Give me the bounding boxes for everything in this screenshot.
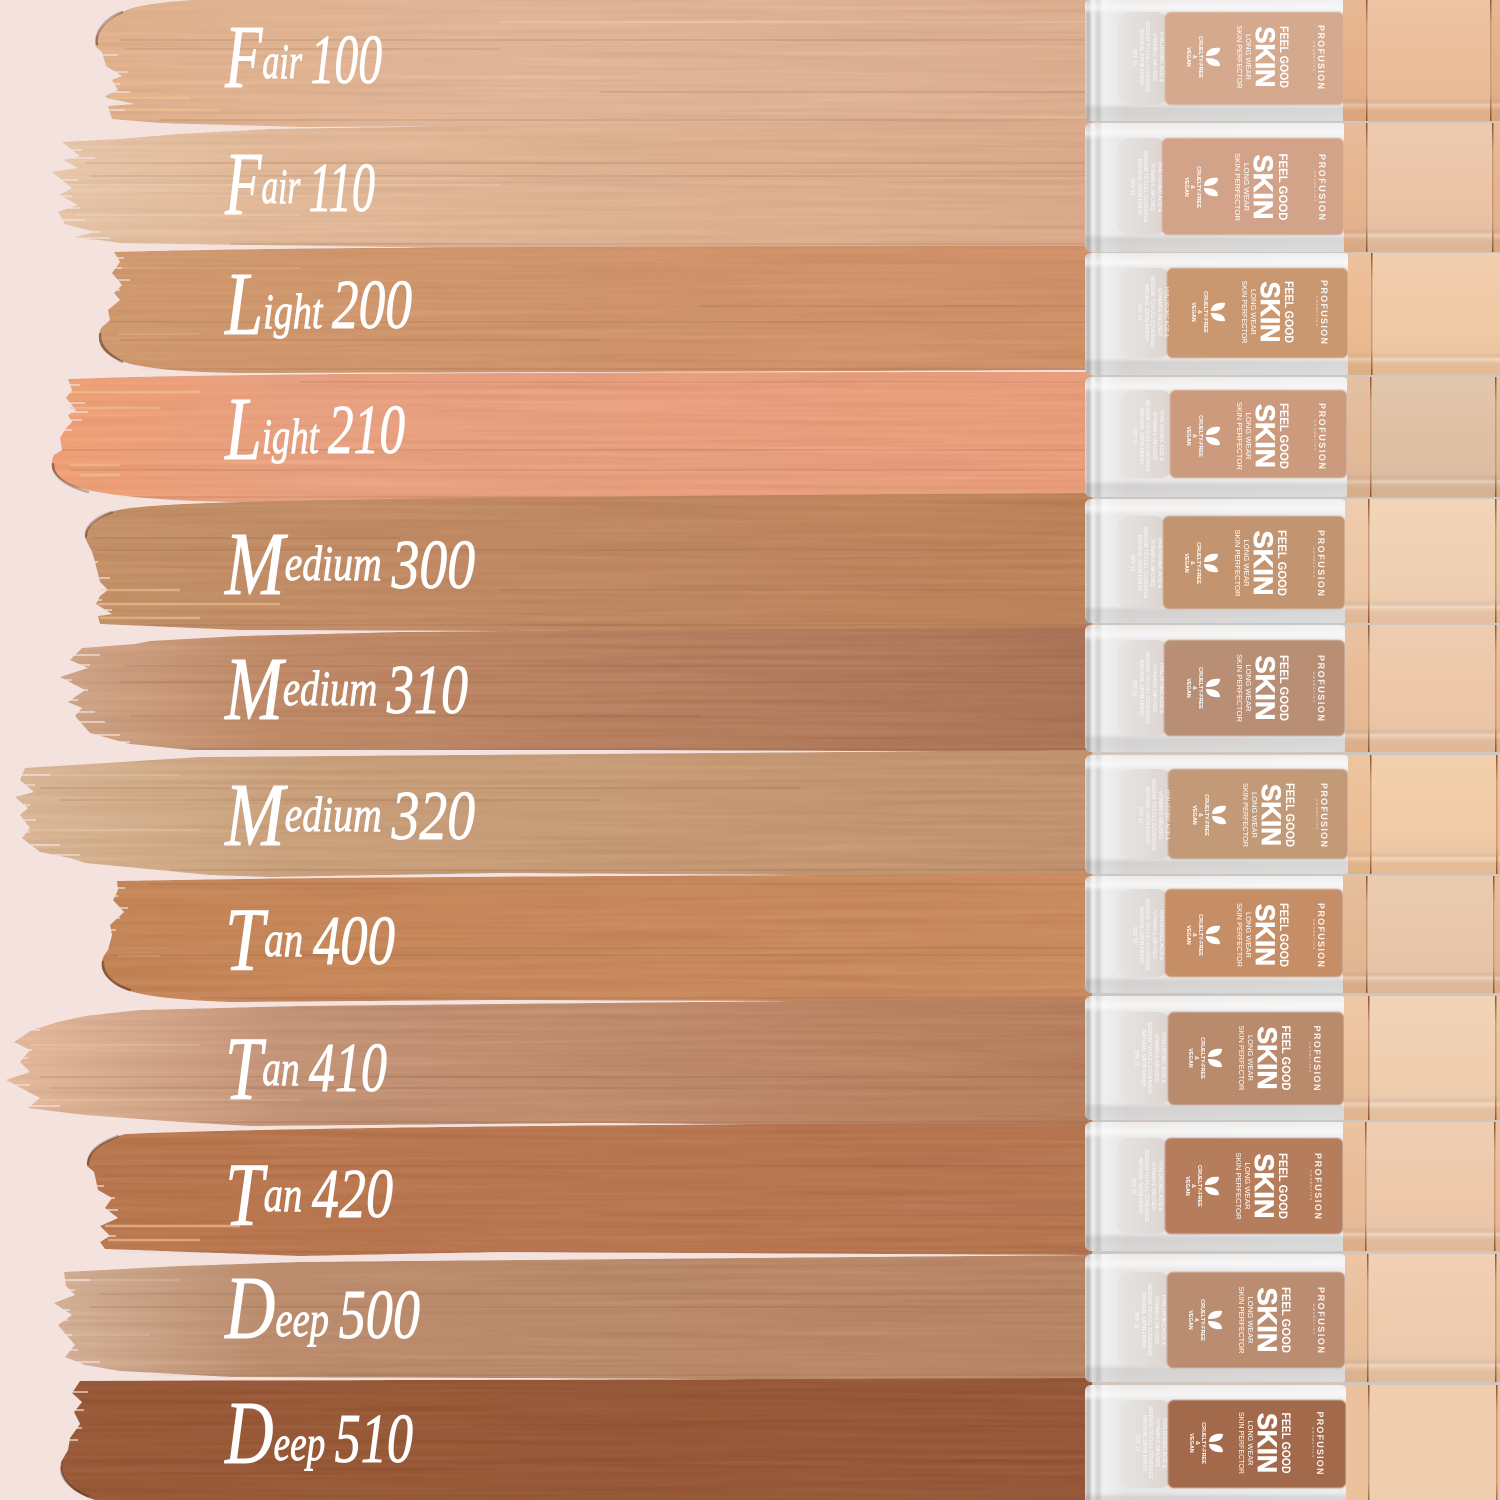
bottle text: SPF 15	[1133, 1050, 1139, 1067]
bottle cap	[1345, 1254, 1500, 1382]
bottle text: FEEL GOOD	[1275, 530, 1287, 596]
bottle text: COSMETICS	[1313, 171, 1317, 203]
label: Deep 500: eep	[275, 1291, 339, 1347]
label: Tan 410: 410	[309, 1030, 387, 1107]
bottle text: VITAMIN E INFUSED	[1151, 664, 1157, 712]
bottle text: VITAMIN E INFUSED	[1153, 1296, 1159, 1344]
bottle text: COSMETICS	[1313, 420, 1317, 452]
label: Deep 510: eep	[274, 1415, 335, 1471]
bottle cap	[1348, 253, 1500, 375]
bottle text: HYALURONIC ACID &	[1160, 1033, 1166, 1084]
label: Tan 410: an	[262, 1040, 309, 1096]
bottle text: &	[1189, 185, 1195, 189]
label: Medium 300: M	[223, 515, 289, 614]
bottle text: CRUELTY-FREE	[1199, 1037, 1205, 1079]
bottle text: VEGAN	[1184, 1176, 1190, 1196]
bottle text: VITAMIN E INFUSED	[1153, 1034, 1159, 1082]
bottle text: &	[1193, 1056, 1199, 1060]
bottle text: MEDIUM TO FULL COVERAGE	[1146, 1022, 1152, 1094]
bottle text: VEGAN	[1185, 47, 1191, 67]
bottle text: SKIN	[1250, 404, 1280, 468]
bottle: Medium 320	[1085, 755, 1500, 874]
bottle text: MEDIUM TO FULL COVERAGE	[1142, 151, 1148, 223]
bottle text: VEGAN	[1188, 1433, 1194, 1453]
bottle text: MEDIUM TO FULL COVERAGE	[1142, 527, 1148, 599]
bottle text: FEEL GOOD	[1279, 1026, 1291, 1090]
bottle text: LONG WEAR	[1244, 412, 1253, 460]
label: Fair 100: 100	[311, 22, 382, 99]
bottle text: HYALURONIC ACID &	[1158, 663, 1164, 714]
label: Tan 420: an	[264, 1166, 312, 1222]
bottle text: SKIN	[1249, 1154, 1279, 1218]
bottle text: CRUELTY-FREE	[1203, 794, 1209, 836]
label: Deep 510: D	[224, 1384, 274, 1483]
swatch: Deep 500	[54, 1255, 1092, 1381]
bottle text: NATURAL SATIN FINISH	[1138, 907, 1144, 964]
bottle text: CRUELTY-FREE	[1197, 667, 1203, 709]
bottle text: SPF 15	[1136, 304, 1142, 321]
bottle: Tan 410	[1085, 996, 1500, 1120]
bottle cap	[1343, 1122, 1500, 1251]
bottle text: VITAMIN E INFUSED	[1156, 288, 1162, 336]
bottle text: HYALURONIC ACID &	[1156, 538, 1162, 589]
bottle text: CRUELTY-FREE	[1195, 166, 1201, 208]
bottle text: COSMETICS	[1312, 672, 1316, 704]
label: Medium 310: 310	[386, 652, 468, 729]
label: Deep 500: D	[223, 1259, 275, 1358]
bottle text: NATURAL SATIN FINISH	[1136, 159, 1142, 216]
bottle text: PROFUSION	[1316, 1287, 1326, 1353]
bottle text: VITAMIN E INFUSED	[1151, 33, 1157, 81]
bottle text: COSMETICS	[1311, 1427, 1315, 1459]
bottle text: SPF 15	[1129, 179, 1135, 196]
bottle text: SPF 15	[1131, 927, 1137, 944]
bottle text	[1134, 1407, 1325, 1479]
bottle text: FEEL GOOD	[1279, 1287, 1291, 1353]
bottle text: LONG WEAR	[1242, 539, 1251, 587]
bottle text: SKIN PERFECTOR	[1237, 1026, 1246, 1091]
bottle text: SKIN	[1248, 154, 1278, 220]
bottle text: SPF 15	[1129, 555, 1135, 572]
bottle label panel	[1162, 138, 1344, 235]
bottle text: CRUELTY-FREE	[1196, 1165, 1202, 1207]
bottle text: SKIN PERFECTOR	[1234, 1152, 1243, 1220]
bottle text: HYALURONIC ACID &	[1157, 1161, 1163, 1212]
label: Tan 400: T	[225, 891, 269, 990]
bottle text: HYALURONIC ACID &	[1156, 162, 1162, 213]
label: Fair 110: air	[262, 158, 309, 214]
bottle text: HYALURONIC ACID &	[1161, 1418, 1167, 1469]
swatch: Fair 110	[52, 120, 1092, 252]
bottle: Tan 420	[1085, 1122, 1500, 1251]
bottle: Light 210	[1085, 377, 1500, 497]
bottle text: COSMETICS	[1312, 547, 1316, 579]
bottle text: HYALURONIC ACID &	[1158, 32, 1164, 83]
bottle text: FEEL GOOD	[1277, 655, 1289, 721]
bottle text: MEDIUM TO FULL COVERAGE	[1147, 1407, 1153, 1479]
bottle text: &	[1194, 1441, 1200, 1445]
bottle: Deep 500	[1085, 1254, 1500, 1382]
bottle text: HYALURONIC ACID &	[1160, 1295, 1166, 1346]
label: Medium 320: edium	[285, 786, 392, 842]
bottle text: LONG WEAR	[1244, 664, 1253, 712]
bottle text: SKIN PERFECTOR	[1233, 153, 1242, 222]
bottle text: FEEL GOOD	[1279, 1412, 1291, 1474]
bottle text: FEEL GOOD	[1277, 403, 1289, 469]
bottle text: HYALURONIC ACID &	[1158, 411, 1164, 462]
bottle text: VITAMIN E INFUSED	[1151, 412, 1157, 460]
bottle text: SPF 15	[1131, 49, 1137, 66]
bottle text: CRUELTY-FREE	[1197, 914, 1203, 956]
swatch: Light 210	[52, 372, 1092, 502]
bottle text: VEGAN	[1187, 1048, 1193, 1068]
bottle text: SKIN PERFECTOR	[1233, 530, 1242, 597]
bottle text: VITAMIN E INFUSED	[1149, 163, 1155, 211]
label: Light 210: 210	[328, 392, 405, 469]
bottle label panel	[1164, 640, 1345, 736]
bottle label panel	[1168, 1400, 1346, 1488]
bottle text: MEDIUM TO FULL COVERAGE	[1144, 400, 1150, 472]
bottle text: SKIN PERFECTOR	[1235, 26, 1244, 89]
bottle text: CRUELTY-FREE	[1200, 1422, 1206, 1464]
bottle text: NATURAL SATIN FINISH	[1140, 1292, 1146, 1349]
bottle text	[1130, 1150, 1323, 1222]
bottle text: SKIN PERFECTOR	[1235, 903, 1244, 968]
label: Medium 310: edium	[283, 660, 387, 716]
bottle text: VEGAN	[1185, 678, 1191, 698]
label: Light 210: L	[224, 380, 262, 479]
bottle text: VEGAN	[1185, 426, 1191, 446]
bottle text: NATURAL SATIN FINISH	[1136, 535, 1142, 592]
bottle text: FEEL GOOD	[1282, 281, 1294, 343]
bottle text	[1133, 1022, 1322, 1094]
bottle label panel	[1165, 889, 1343, 977]
label: Light 200: 200	[332, 267, 412, 344]
bottle text: COSMETICS	[1308, 1042, 1312, 1074]
swatch: Deep 510	[61, 1378, 1092, 1500]
bottle text: LONG WEAR	[1243, 1162, 1252, 1210]
bottle text: PROFUSION	[1317, 403, 1327, 469]
bottle text: NATURAL SATIN FINISH	[1138, 660, 1144, 717]
bottle text: VITAMIN E INFUSED	[1157, 791, 1163, 839]
swatch: Medium 300	[85, 493, 1092, 631]
bottle label panel	[1167, 268, 1348, 358]
bottle label panel	[1168, 1012, 1344, 1105]
bottle text: PROFUSION	[1316, 903, 1326, 967]
label: Tan 400: 400	[313, 903, 395, 980]
bottle text: MEDIUM TO FULL COVERAGE	[1150, 779, 1156, 851]
label: Fair 110: F	[224, 135, 262, 234]
bottle text	[1133, 1284, 1326, 1356]
bottle text: PROFUSION	[1319, 783, 1329, 847]
bottle text: SKIN	[1250, 656, 1280, 720]
bottle text: SKIN PERFECTOR	[1235, 402, 1244, 471]
bottle text: SKIN	[1250, 904, 1280, 966]
bottle text: PROFUSION	[1316, 655, 1326, 721]
bottle text	[1131, 21, 1326, 93]
bottle cap	[1348, 755, 1500, 874]
bottle text: NATURAL SATIN FINISH	[1141, 1415, 1147, 1472]
bottle text: HYALURONIC ACID &	[1164, 790, 1170, 841]
bottle text: PROFUSION	[1315, 1412, 1325, 1474]
bottle text: LONG WEAR	[1246, 1035, 1255, 1082]
bottle text: LONG WEAR	[1246, 1420, 1255, 1466]
bottle text: SPF 15	[1137, 807, 1143, 824]
bottle text: PROFUSION	[1317, 154, 1327, 220]
bottle text: COSMETICS	[1315, 799, 1319, 831]
bottle text: PROFUSION	[1316, 530, 1326, 596]
bottle text: PROFUSION	[1312, 1026, 1322, 1090]
bottle text: SKIN PERFECTOR	[1240, 280, 1249, 344]
bottle text: COSMETICS	[1312, 919, 1316, 951]
bottle: Tan 400	[1085, 876, 1500, 993]
bottle text: COSMETICS	[1309, 1170, 1313, 1202]
bottle text: SKIN	[1248, 530, 1278, 596]
bottle label panel	[1165, 1138, 1343, 1234]
swatch: Fair 100	[95, 0, 1092, 127]
bottle text: CRUELTY-FREE	[1195, 542, 1201, 584]
bottle text: MEDIUM TO FULL COVERAGE	[1144, 652, 1150, 724]
bottle text: &	[1191, 686, 1197, 690]
label: Medium 300: edium	[285, 535, 392, 591]
bottle text: FEEL GOOD	[1276, 1153, 1288, 1219]
bottle text: VITAMIN E INFUSED	[1149, 539, 1155, 587]
bottle cap	[1344, 123, 1500, 252]
bottle text: FEEL GOOD	[1283, 783, 1295, 847]
bottle text: LONG WEAR	[1242, 163, 1251, 212]
bottle text: VEGAN	[1190, 302, 1196, 322]
bottle text: PROFUSION	[1319, 280, 1329, 344]
bottle label panel	[1165, 12, 1344, 105]
bottle text: SKIN	[1252, 1413, 1282, 1473]
bottle text: SPF 15	[1133, 1312, 1139, 1329]
bottle label panel	[1163, 516, 1345, 609]
foundation swatches	[6, 0, 1092, 1500]
bottle text: LONG WEAR	[1250, 792, 1259, 839]
bottle text: SKIN PERFECTOR	[1235, 654, 1244, 723]
bottle text: VEGAN	[1191, 805, 1197, 825]
swatch: Medium 310	[60, 626, 1092, 752]
bottle text: SKIN	[1255, 282, 1285, 342]
bottle text: MEDIUM TO FULL COVERAGE	[1144, 899, 1150, 971]
label: Tan 420: 420	[312, 1156, 393, 1233]
bottle cap	[1345, 499, 1500, 623]
bottle text: PROFUSION	[1313, 1153, 1323, 1219]
bottle text	[1131, 652, 1326, 724]
bottle text: SKIN	[1252, 1026, 1282, 1090]
bottle text: HYALURONIC ACID &	[1158, 910, 1164, 961]
bottle text: &	[1189, 561, 1195, 565]
bottle text: &	[1193, 1318, 1199, 1322]
bottle text: VITAMIN E INFUSED	[1154, 1419, 1160, 1467]
bottle text: SKIN	[1256, 784, 1286, 846]
bottle cap	[1344, 996, 1500, 1120]
bottle text: VEGAN	[1183, 553, 1189, 573]
bottle text: HYALURONIC ACID &	[1163, 287, 1169, 338]
bottle text: COSMETICS	[1312, 41, 1316, 73]
label: Medium 300: 300	[391, 527, 475, 604]
bottle text: LONG WEAR	[1244, 34, 1253, 81]
label: Deep 510: 510	[335, 1401, 413, 1478]
bottle text: LONG WEAR	[1244, 912, 1253, 959]
bottle text: &	[1190, 1184, 1196, 1188]
label: Tan 410: T	[225, 1020, 267, 1119]
bottle: Medium 300	[1085, 499, 1500, 623]
shade labels	[223, 8, 475, 1483]
bottle text: VEGAN	[1187, 1310, 1193, 1330]
bottle text: &	[1196, 310, 1202, 314]
bottle text: MEDIUM TO FULL COVERAGE	[1144, 21, 1150, 93]
bottle text	[1131, 899, 1326, 971]
label: Light 210: ight	[262, 408, 328, 464]
bottle text	[1131, 400, 1327, 472]
bottle text: FEEL GOOD	[1277, 903, 1289, 967]
label: Fair 100: air	[262, 33, 311, 89]
bottle text: SKIN	[1250, 26, 1280, 88]
bottle text: PROFUSION	[1316, 25, 1326, 89]
bottle text: NATURAL SATIN FINISH	[1137, 1158, 1143, 1215]
bottle text: MEDIUM TO FULL COVERAGE	[1143, 1150, 1149, 1222]
bottle text: LONG WEAR	[1249, 289, 1258, 336]
bottle text: NATURAL SATIN FINISH	[1140, 1030, 1146, 1087]
bottle: Light 200	[1085, 253, 1500, 375]
bottle text: SKIN PERFECTOR	[1237, 1286, 1246, 1354]
bottle text: NATURAL SATIN FINISH	[1144, 787, 1150, 844]
label: Tan 400: an	[264, 911, 313, 967]
label: Medium 320: M	[223, 766, 289, 865]
bottle: Fair 110	[1085, 123, 1500, 252]
bottle text: NATURAL SATIN FINISH	[1138, 408, 1144, 465]
label: Medium 310: M	[223, 640, 287, 739]
bottle label panel	[1168, 769, 1348, 859]
label: Fair 100: F	[224, 8, 263, 107]
bottle text: &	[1191, 55, 1197, 59]
swatch: Medium 320	[15, 750, 1092, 877]
bottle cap	[1343, 876, 1500, 993]
bottle text: CRUELTY-FREE	[1197, 415, 1203, 457]
bottle text	[1136, 276, 1329, 348]
bottle text: &	[1191, 933, 1197, 937]
bottle text: LONG WEAR	[1246, 1296, 1255, 1344]
bottle text: VEGAN	[1185, 925, 1191, 945]
bottle: Medium 310	[1085, 625, 1500, 752]
bottle text: COSMETICS	[1312, 1304, 1316, 1336]
bottle text: SKIN PERFECTOR	[1237, 1412, 1246, 1475]
bottle text: SPF 15	[1131, 680, 1137, 697]
bottle text	[1137, 779, 1329, 851]
bottle text: VEGAN	[1183, 177, 1189, 197]
bottle text	[1129, 151, 1327, 223]
bottle text: &	[1197, 813, 1203, 817]
bottle cap	[1343, 0, 1500, 121]
bottle text	[1129, 527, 1326, 599]
bottle text: MEDIUM TO FULL COVERAGE	[1146, 1284, 1152, 1356]
bottle text: SPF 15	[1131, 428, 1137, 445]
label: Medium 320: 320	[391, 778, 475, 855]
bottle text: &	[1191, 434, 1197, 438]
swatch: Tan 420	[87, 1123, 1092, 1256]
swatch: Light 200	[99, 246, 1092, 373]
swatch: Tan 400	[102, 874, 1092, 1002]
bottle cap	[1346, 1385, 1500, 1500]
bottle text: NATURAL SATIN FINISH	[1143, 284, 1149, 341]
bottle text: COSMETICS	[1315, 296, 1319, 328]
bottle text: VITAMIN E INFUSED	[1151, 911, 1157, 959]
bottle text: SKIN PERFECTOR	[1241, 783, 1250, 848]
bottle text: MEDIUM TO FULL COVERAGE	[1149, 276, 1155, 348]
bottle text: CRUELTY-FREE	[1197, 36, 1203, 78]
bottle text: NATURAL SATIN FINISH	[1138, 29, 1144, 86]
bottle cap	[1347, 377, 1500, 497]
bottle text: FEEL GOOD	[1277, 26, 1289, 88]
bottle text: CRUELTY-FREE	[1199, 1299, 1205, 1341]
label: Deep 500: 500	[339, 1277, 420, 1354]
bottle label panel	[1170, 390, 1347, 478]
bottle text: SKIN	[1252, 1288, 1282, 1352]
bottle label panel	[1167, 1272, 1345, 1368]
swatch: Tan 410	[6, 998, 1092, 1128]
label: Tan 420: T	[225, 1146, 268, 1245]
bottle: Fair 100	[1085, 0, 1500, 121]
bottle: Deep 510	[1085, 1385, 1500, 1500]
bottle text: CRUELTY-FREE	[1202, 291, 1208, 333]
bottle text: SPF 15	[1130, 1178, 1136, 1195]
bottle cap	[1345, 625, 1500, 752]
bottle text: FEEL GOOD	[1276, 154, 1288, 220]
bottle text: SPF 15	[1134, 1435, 1140, 1452]
label: Light 200: L	[223, 255, 263, 354]
bottle text: VITAMIN E INFUSED	[1150, 1162, 1156, 1210]
label: Fair 110: 110	[309, 150, 375, 227]
label: Light 200: ight	[263, 283, 332, 339]
